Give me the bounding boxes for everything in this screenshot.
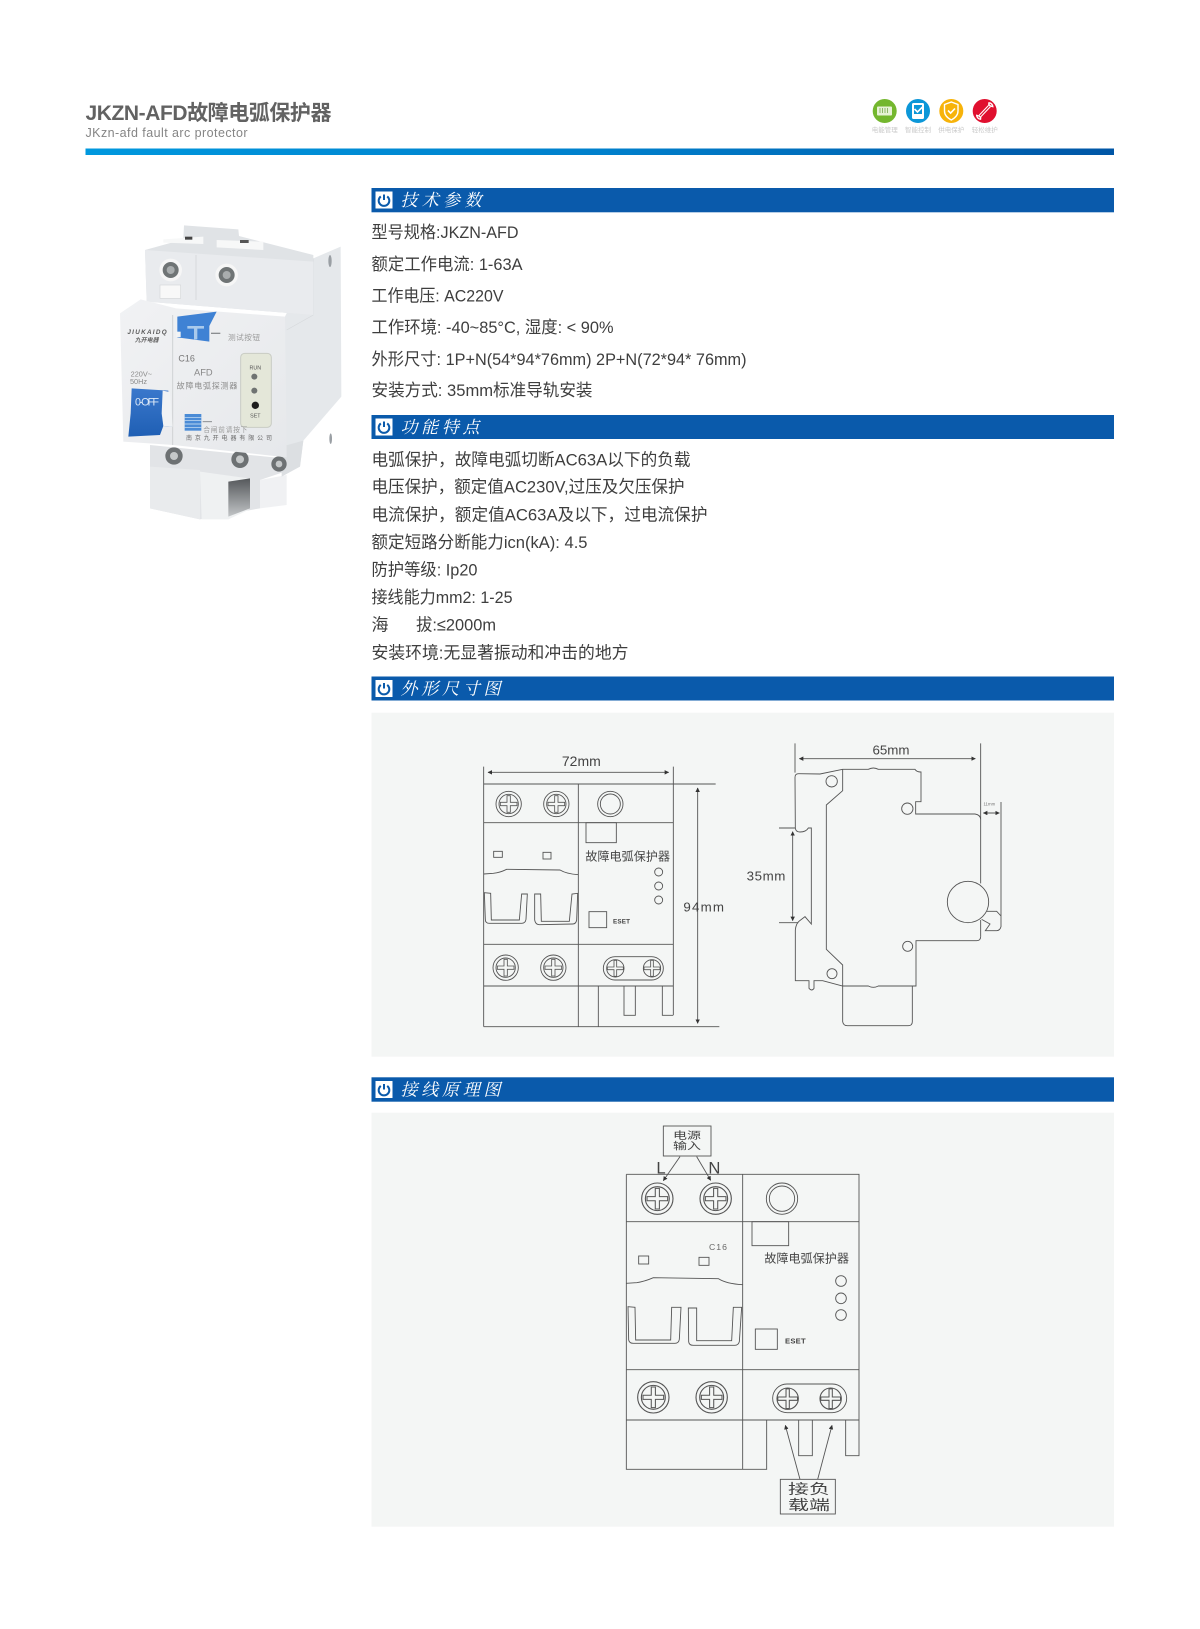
feature lines: 安装环境:无显著振动和冲击的地方 bbox=[372, 644, 628, 662]
product photo: circuit protector: 220V~ bbox=[131, 370, 152, 379]
lower housing bbox=[150, 445, 300, 519]
product photo: circuit protector: 故障电弧探测器 bbox=[177, 381, 237, 391]
panel: wiring diagram bbox=[372, 1076, 1114, 1527]
product photo: circuit protector: 50Hz bbox=[130, 377, 147, 386]
header rule bbox=[86, 148, 1114, 155]
heading bar: 接线原理图 bbox=[400, 1076, 504, 1100]
front panel bbox=[120, 299, 287, 457]
parameter lines: 工作电压: AC220V bbox=[372, 286, 504, 306]
load terminal label: 接负 bbox=[788, 1481, 830, 1497]
feature lines: 电压保护，额定值AC230V,过压及欠压保护 bbox=[372, 478, 684, 496]
product photo: circuit protector: RUN bbox=[250, 365, 261, 371]
product photo: circuit protector: AFD bbox=[194, 367, 213, 377]
panel labels bbox=[211, 331, 220, 335]
side view drawing: 11mm bbox=[983, 802, 996, 807]
front view drawing bbox=[484, 753, 724, 1027]
upper housing bbox=[145, 225, 313, 315]
wiring drawing: C16 bbox=[709, 1242, 727, 1252]
power input label: 输入 bbox=[673, 1139, 701, 1152]
front view drawing: 故障电弧保护器 bbox=[585, 849, 670, 864]
feature lines: 额定短路分断能力icn(kA): 4.5 bbox=[372, 533, 588, 552]
power input label bbox=[663, 1126, 711, 1156]
front view drawing: 72mm bbox=[562, 753, 601, 769]
product photo: circuit protector: C16 bbox=[178, 353, 195, 363]
heading bar: 外形尺寸图 bbox=[400, 674, 504, 700]
product photo: circuit protector: 0-OFF bbox=[135, 397, 159, 409]
icon: shield: 供电保护 bbox=[938, 125, 964, 134]
product photo: circuit protector bbox=[120, 225, 341, 519]
parameter lines: 工作环境: -40~85°C, 湿度: < 90% bbox=[372, 318, 614, 337]
parameter lines bbox=[372, 223, 746, 400]
feature lines: 拔:≤2000m bbox=[416, 616, 496, 634]
panel: outline dimensions bbox=[372, 674, 1114, 1057]
background bbox=[372, 713, 1114, 1057]
heading bar: 技术参数 bbox=[400, 186, 484, 211]
parameter lines: 型号规格:JKZN-AFD bbox=[372, 223, 518, 242]
product photo: circuit protector: 测试按钮 bbox=[228, 332, 260, 342]
heading bar bbox=[372, 413, 1114, 439]
product photo: circuit protector: 合闸前请按下 bbox=[203, 425, 248, 434]
feature lines: 电流保护，额定值AC63A及以下，过电流保护 bbox=[372, 506, 708, 524]
icon: phone control: 智能控制 bbox=[905, 125, 932, 134]
wiring drawing: ESET bbox=[785, 1337, 806, 1346]
background bbox=[372, 1113, 1114, 1527]
parameter lines: 安装方式: 35mm标准导轨安装 bbox=[372, 381, 592, 400]
product photo: circuit protector: SET bbox=[250, 413, 261, 419]
product photo: circuit protector: 南京九开电器有限公司 bbox=[186, 434, 272, 442]
parameter lines: 外形尺寸: 1P+N(54*94*76mm) 2P+N(72*94* 76mm) bbox=[372, 350, 746, 369]
side view drawing bbox=[747, 743, 1001, 1026]
icon: battery: 电能管理 bbox=[872, 125, 898, 134]
breaker outline bbox=[626, 1174, 859, 1469]
feature lines bbox=[372, 450, 708, 662]
title bbox=[86, 101, 332, 140]
rocker switch bbox=[128, 388, 172, 437]
heading bar: 功能特点 bbox=[400, 413, 482, 438]
heading bar bbox=[372, 186, 1114, 212]
indicator panel bbox=[241, 353, 271, 427]
feature lines: 海 bbox=[372, 616, 388, 634]
wiring drawing: N bbox=[708, 1158, 720, 1177]
wiring drawing: 故障电弧保护器 bbox=[764, 1251, 849, 1266]
icon: wrench: 轻松维护 bbox=[972, 125, 998, 134]
terminal screws bbox=[159, 259, 182, 281]
panel: features bbox=[372, 413, 1114, 662]
front view drawing: ESET bbox=[613, 919, 630, 926]
side view drawing: 65mm bbox=[872, 743, 910, 758]
subtitle: JKzn-afd fault arc protector bbox=[86, 126, 248, 140]
product photo: circuit protector: JIUKAIDQ bbox=[127, 329, 167, 336]
wiring drawing: L bbox=[656, 1158, 666, 1177]
load terminal label: 载端 bbox=[788, 1497, 830, 1513]
power input label: 电源 bbox=[673, 1129, 701, 1142]
feature lines: 防护等级: Ip20 bbox=[372, 560, 478, 580]
product photo: circuit protector: 九开电器 bbox=[135, 336, 160, 344]
heading bar bbox=[372, 674, 1114, 700]
side view drawing: 35mm bbox=[747, 869, 785, 884]
panel: technical parameters bbox=[372, 186, 1114, 400]
feature icons bbox=[872, 99, 998, 134]
parameter lines: 额定工作电流: 1-63A bbox=[372, 255, 523, 274]
load terminal label bbox=[780, 1479, 835, 1514]
wiring drawing bbox=[626, 1126, 859, 1514]
test button bbox=[177, 312, 217, 342]
right side body bbox=[285, 247, 341, 467]
title: JKZN-AFD故障电弧保护器 bbox=[86, 101, 332, 125]
feature lines: 电弧保护，故障电弧切断AC63A以下的负载 bbox=[372, 450, 690, 470]
front view drawing: 94mm bbox=[683, 899, 724, 914]
heading bar bbox=[372, 1076, 1114, 1102]
blue stripes bbox=[185, 414, 201, 431]
feature lines: 接线能力mm2: 1-25 bbox=[372, 588, 512, 607]
